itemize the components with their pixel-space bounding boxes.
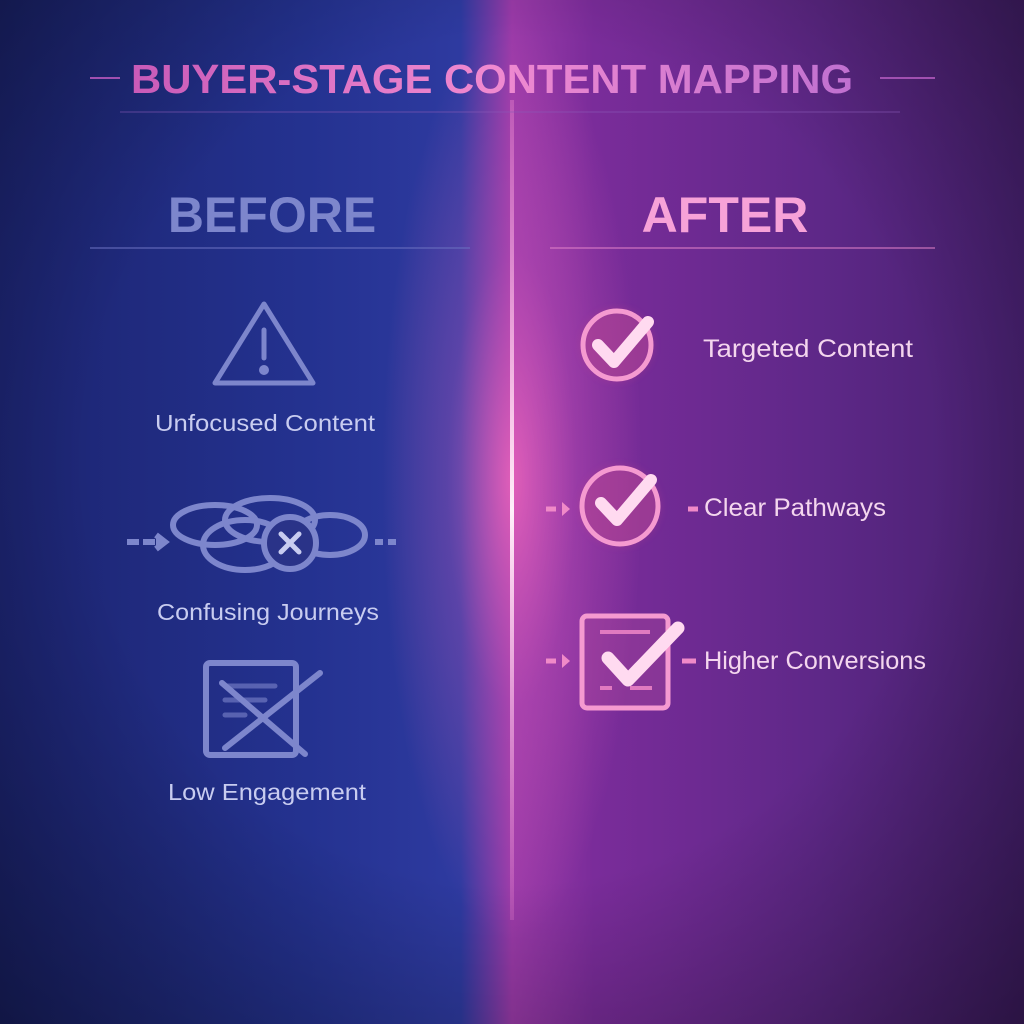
before item: confusing journeys bbox=[127, 498, 400, 625]
after item: higher conversions bbox=[546, 616, 926, 708]
icon: check circle bbox=[581, 309, 653, 381]
icon: check circle with arrows bbox=[546, 506, 556, 512]
title: BUYER-STAGE CONTENT MAPPING bbox=[131, 56, 853, 102]
icon: crossed document bbox=[206, 663, 320, 755]
before item: low engagement bbox=[168, 663, 367, 805]
after item: clear pathways: Clear Pathways bbox=[704, 494, 886, 522]
heading: after: AFTER bbox=[642, 187, 808, 243]
icon: warning triangle bbox=[215, 304, 313, 383]
after item: higher conversions: Higher Conversions bbox=[704, 647, 926, 675]
after item: targeted content bbox=[581, 309, 913, 381]
after item: targeted content: Targeted Content bbox=[703, 335, 913, 363]
icon: tangled path bbox=[127, 498, 400, 570]
heading: before: BEFORE bbox=[168, 187, 376, 243]
icon: checked document bbox=[546, 658, 556, 664]
before item: unfocused content: Unfocused Content bbox=[155, 410, 376, 436]
before item: low engagement: Low Engagement bbox=[168, 779, 367, 805]
after item: clear pathways bbox=[546, 466, 886, 546]
before item: unfocused content bbox=[155, 304, 376, 436]
before item: confusing journeys: Confusing Journeys bbox=[157, 599, 379, 625]
